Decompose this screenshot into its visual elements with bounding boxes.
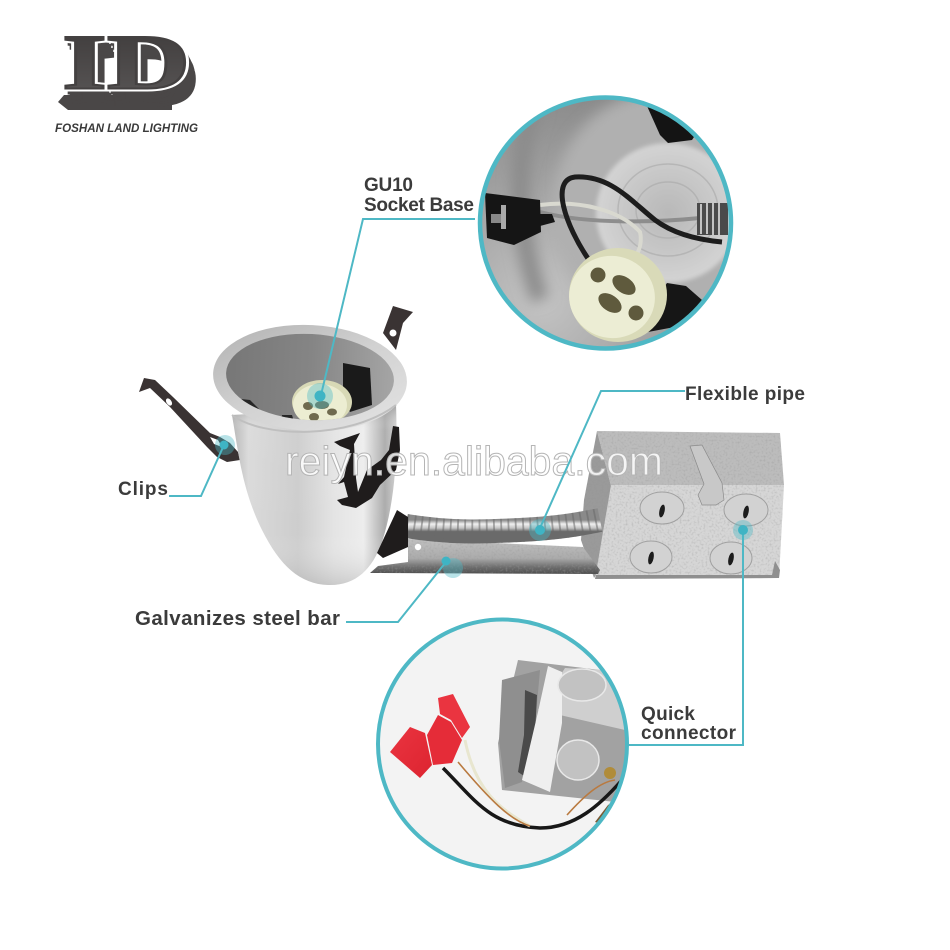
inset ring bbox=[480, 98, 731, 348]
logo extrusion band bbox=[58, 95, 172, 110]
upper spring clip bbox=[383, 306, 413, 350]
cup interior contents bbox=[241, 363, 372, 420]
right pipe end bbox=[697, 203, 728, 235]
inset ring bbox=[378, 620, 627, 868]
inset wall bbox=[482, 100, 670, 346]
callout: Flexible pipe bbox=[529, 384, 805, 541]
inner connector bbox=[343, 363, 372, 412]
callout: Clips bbox=[118, 435, 235, 500]
callout: GU10 Socket Base: GU10 bbox=[364, 175, 413, 196]
mini box dark detail bbox=[518, 690, 537, 780]
callout: Clips: Clips bbox=[118, 479, 168, 500]
logo letters ID: ID bbox=[70, 32, 198, 118]
box knockouts bbox=[630, 492, 768, 574]
lower-right black clip bbox=[648, 283, 702, 332]
box flange bbox=[595, 561, 780, 579]
top-right black clip bbox=[648, 107, 694, 143]
inset wall dark band bbox=[521, 105, 540, 300]
left connector bbox=[485, 193, 555, 245]
GU10 socket small bbox=[292, 380, 352, 420]
callout: Galvanizes steel bar bbox=[135, 556, 463, 630]
callout: Quick connector: connector bbox=[641, 723, 737, 744]
rim front lip shine bbox=[232, 405, 396, 432]
product: recessed housing with junction box bbox=[139, 306, 784, 585]
logo wordmark: FOSHAN LAND LIGHTING bbox=[55, 123, 198, 135]
box clip tab bbox=[690, 445, 724, 505]
inset circle: GU10 socket bbox=[478, 95, 734, 351]
mini knockouts bbox=[557, 669, 606, 780]
mini box upper right bbox=[538, 668, 630, 730]
wires bbox=[443, 740, 622, 828]
logo letters ID: ID bbox=[66, 24, 194, 110]
disc rings bbox=[618, 164, 718, 256]
box front face bbox=[595, 485, 784, 579]
logo letters ID: ID bbox=[68, 28, 196, 114]
inset cone wall bbox=[555, 100, 724, 300]
logo letters ID: ID bbox=[71, 36, 199, 122]
cup interior bbox=[224, 330, 396, 424]
callout: Quick connector: Quick bbox=[641, 704, 695, 725]
callout: GU10 Socket Base bbox=[307, 175, 475, 409]
inset base disc bbox=[596, 143, 740, 283]
galvanized steel bar bbox=[370, 539, 600, 574]
box top face bbox=[597, 431, 784, 486]
left spring clip bbox=[139, 378, 240, 462]
red connector middle bbox=[427, 715, 462, 765]
knockout slots bbox=[647, 504, 750, 566]
cup rim bbox=[210, 320, 410, 436]
mini box bbox=[498, 660, 630, 803]
flexible pipe bbox=[406, 520, 600, 531]
grey wire bbox=[540, 212, 700, 221]
watermark: reiyn.en.alibaba.com bbox=[285, 438, 663, 484]
black wire bbox=[562, 177, 722, 260]
GU10 socket large bbox=[569, 248, 667, 342]
mini box bright strip bbox=[522, 666, 562, 792]
junction box bbox=[581, 431, 784, 579]
red connector right bbox=[438, 694, 470, 738]
callout: Flexible pipe: Flexible pipe bbox=[685, 384, 805, 405]
logo: ID Foshan Land Lighting bbox=[55, 20, 199, 135]
logo letters ID: ID bbox=[62, 20, 190, 106]
callout: GU10 Socket Base: Socket Base bbox=[364, 195, 474, 216]
cup body bbox=[232, 405, 396, 585]
black clip brackets bbox=[334, 426, 408, 558]
callout: Galvanizes steel bar: Galvanizes steel bar bbox=[135, 607, 340, 630]
white wire bbox=[540, 204, 641, 255]
brown corner bbox=[595, 804, 610, 822]
inset circle: quick connector bbox=[378, 620, 630, 868]
inner dark clips bbox=[241, 399, 293, 418]
box left side bbox=[581, 431, 611, 578]
mini box dark strip bbox=[499, 670, 540, 788]
logo letters ID: ID bbox=[62, 20, 190, 106]
callout: Quick connector bbox=[628, 520, 753, 745]
infographic canvas bbox=[55, 36, 804, 870]
red connector left bbox=[390, 727, 432, 778]
brass nut bbox=[604, 767, 616, 779]
cup shading bbox=[232, 405, 396, 585]
